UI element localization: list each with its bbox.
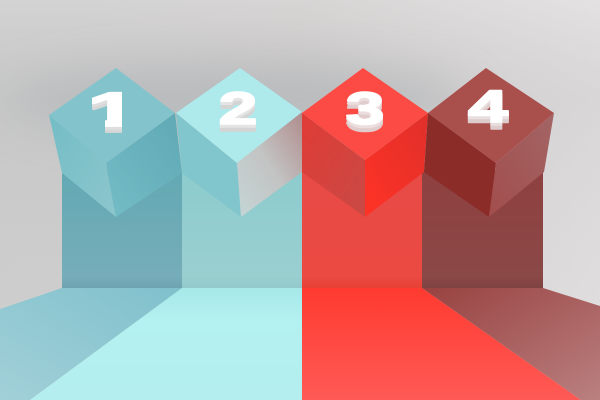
number 1: 1 (87, 88, 139, 143)
cube 2 (176, 68, 302, 217)
panel: band 2 aqua (30, 170, 302, 400)
number 2: 2 (219, 87, 257, 137)
cube 1 (49, 68, 182, 217)
cube 4 (424, 68, 554, 217)
number 2: 2 (219, 84, 257, 134)
number 1: 1 (87, 82, 139, 137)
number 2: 2 (219, 91, 257, 141)
number 4: 4 (468, 82, 509, 132)
panel: band 4 dark red (422, 170, 600, 400)
number 3: 3 (346, 91, 384, 141)
number 4: 4 (468, 85, 509, 135)
number 1 (92, 92, 122, 133)
number 3: 3 (346, 84, 384, 134)
number 3: 3 (346, 87, 384, 137)
number 4: 4 (468, 89, 509, 139)
number 1: 1 (87, 85, 139, 140)
panel: band 3 red (302, 170, 581, 400)
panel: band 1 teal (0, 170, 182, 400)
cube 3 (302, 68, 428, 217)
